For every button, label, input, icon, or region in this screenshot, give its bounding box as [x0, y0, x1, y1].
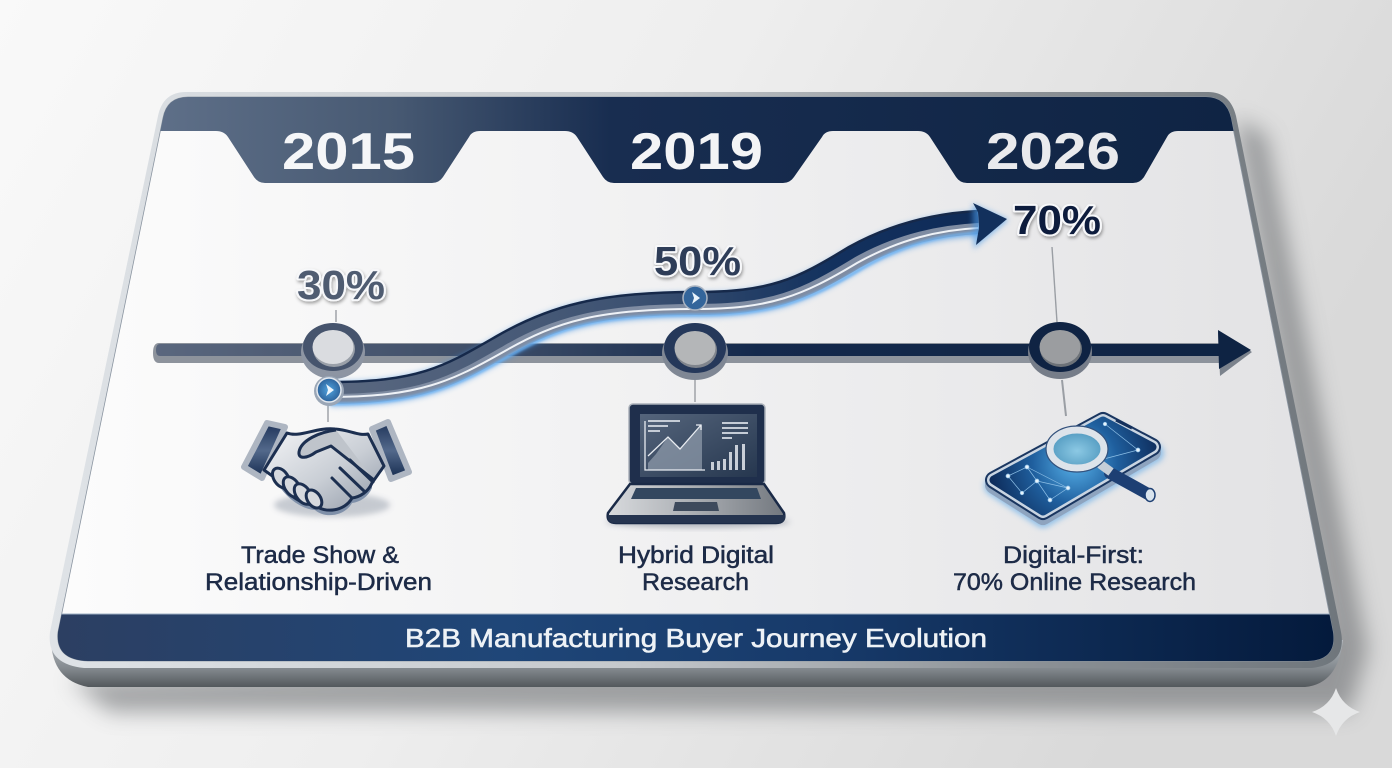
laptop display	[640, 414, 757, 477]
timeline bar	[156, 344, 1222, 356]
phone side	[994, 426, 1152, 516]
phone outline	[994, 421, 1152, 511]
curve top edge	[330, 211, 978, 382]
timeline arrow head lip	[1218, 332, 1252, 376]
label: Digital-First	[953, 542, 1196, 596]
value 50%: 50%	[654, 238, 741, 284]
label: Trade Show: Relationship-Driven	[205, 569, 432, 596]
header band with year tabs	[150, 90, 1245, 183]
rising adoption curve arrow	[330, 203, 1007, 404]
footer band	[40, 614, 1350, 662]
curve glow	[330, 224, 978, 394]
label: Trade Show: Trade Show &	[241, 542, 399, 569]
clasped thumb	[299, 430, 374, 480]
timeline arrow	[153, 330, 1252, 376]
laptop keyboard	[631, 488, 761, 499]
node 2019	[662, 323, 728, 380]
finger lines	[332, 460, 373, 498]
icon: sparkle watermark	[1312, 688, 1360, 736]
left cuff	[244, 423, 285, 478]
timeline bar lip	[153, 343, 1220, 363]
year 2019: 2019	[630, 123, 763, 181]
label: Digital-First: Digital-First:	[1003, 542, 1144, 569]
panel frame	[50, 92, 1342, 668]
year 2026: 2026	[986, 123, 1120, 181]
laptop lid	[629, 404, 765, 484]
handshake shadow	[274, 493, 390, 517]
phone glow	[994, 427, 1154, 518]
value 30%: 30%	[297, 262, 385, 308]
magnifier handle cap	[1145, 488, 1155, 502]
curve dark top	[330, 217, 978, 388]
laptop bottom edge	[608, 515, 785, 523]
phone rim	[994, 421, 1152, 511]
year 2015: 2015	[282, 123, 415, 181]
magnifier rim	[1046, 426, 1108, 472]
laptop chart area	[648, 425, 702, 470]
label: Trade Show	[205, 542, 432, 596]
curve highlight	[330, 228, 978, 397]
panel side edge	[51, 640, 1343, 687]
icon: laptop	[606, 404, 790, 528]
label: Hybrid Digital	[618, 542, 774, 596]
panel: board	[50, 92, 1368, 712]
curve button 2019	[683, 286, 707, 310]
hands depth	[278, 474, 372, 515]
panel shadow	[70, 118, 1368, 712]
timeline arrow head	[1218, 330, 1251, 369]
panel face	[58, 97, 1333, 661]
label: Hybrid Digital: Hybrid Digital	[618, 542, 774, 569]
phone network	[1006, 422, 1140, 502]
laptop chart line	[645, 421, 705, 470]
laptop trackpad	[673, 502, 719, 511]
curve bright lower edge	[330, 233, 978, 404]
label: Hybrid Digital: Research	[642, 569, 749, 596]
magnifier lens	[1050, 430, 1104, 468]
right cuff	[372, 422, 409, 479]
magnifier neck	[1100, 464, 1111, 472]
laptop text lines	[648, 421, 748, 438]
curve body	[330, 223, 978, 393]
curve head glow	[974, 206, 1006, 246]
label: Digital-First: 70% Online Research	[953, 569, 1196, 596]
connector lines	[328, 247, 1066, 422]
laptop base	[608, 484, 784, 523]
node 2026	[1028, 322, 1092, 379]
phone notch	[1116, 420, 1132, 428]
laptop shadow	[606, 516, 790, 528]
footer title: B2B Manufacturing Buyer Journey Evolution	[405, 623, 987, 653]
fingers	[269, 465, 325, 511]
laptop bars	[711, 444, 745, 470]
value 70%: 70%	[1013, 197, 1101, 243]
icon: handshake	[244, 422, 409, 517]
curve head	[973, 203, 1007, 245]
node 2015	[301, 323, 365, 379]
phone screen	[994, 421, 1152, 511]
magnifier handle	[1110, 473, 1148, 494]
curve button 2015	[314, 376, 344, 406]
icon: phone with magnifier	[994, 420, 1155, 518]
hands	[264, 429, 384, 510]
